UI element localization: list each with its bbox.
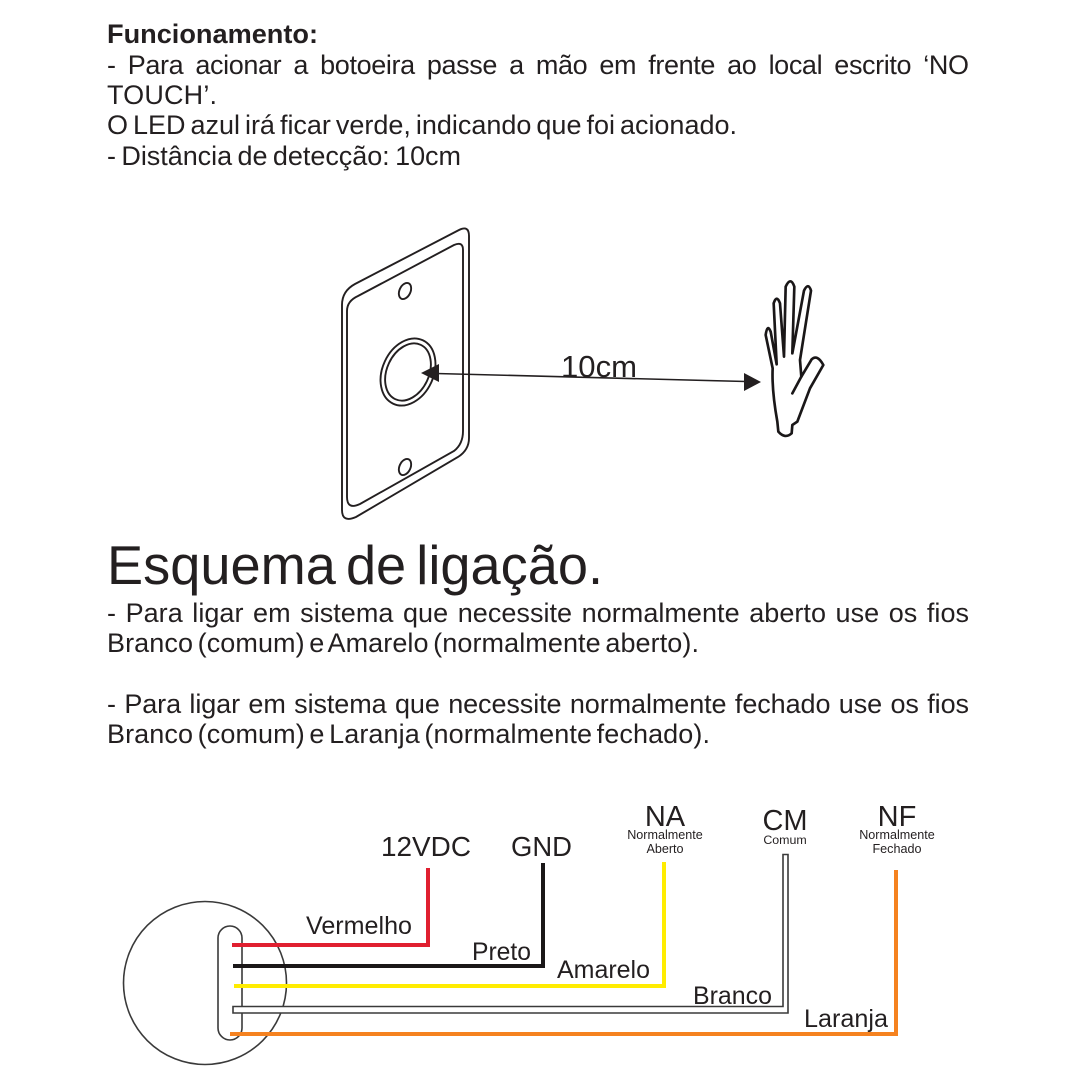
- text block: funcionamento: [107, 19, 969, 171]
- label: normalmente aberto: Normalmente: [627, 828, 703, 842]
- label: normalmente fechado: Fechado: [872, 842, 922, 856]
- icon: hand: [766, 281, 823, 436]
- label: NF: NF: [878, 801, 916, 833]
- label: amarelo: Amarelo: [557, 956, 650, 984]
- text block: normally closed: [107, 689, 969, 749]
- instruction line 1: - Para acionar a botoeira passe a mão em frente ao local escrito ‘NO: [107, 50, 969, 80]
- plate outer outline: [342, 228, 469, 519]
- label: GND: GND: [511, 831, 572, 862]
- wire: white: [233, 854, 788, 1013]
- label: preto: Preto: [472, 938, 531, 966]
- normally closed line 2: Branco (comum) e Laranja (normalmente fechado).: [107, 719, 710, 749]
- label: NA: NA: [645, 801, 686, 833]
- button inner ring: [376, 336, 440, 408]
- wire: orange: [230, 870, 896, 1034]
- label: comum: Comum: [763, 833, 807, 847]
- instruction line 2: TOUCH’.: [107, 80, 217, 110]
- label: vermelho: Vermelho: [306, 912, 412, 940]
- heading: funcionamento: Funcionamento:: [107, 19, 318, 49]
- device circle: [124, 902, 286, 1064]
- wire: yellow: [234, 862, 664, 986]
- wire: black: [233, 863, 543, 966]
- label: laranja: Laranja: [804, 1005, 888, 1033]
- instruction line 3: O LED azul irá ficar verde, indicando que foi acionado.: [107, 110, 737, 140]
- label: normalmente fechado: Normalmente: [859, 828, 935, 842]
- normally closed line 1: - Para ligar em sistema que necessite normalmente fechado use os fios: [107, 689, 969, 719]
- screw hole bottom: [396, 457, 414, 477]
- detection distance line: - Distância de detecção: 10cm: [107, 141, 461, 171]
- label: normalmente aberto: Aberto: [646, 842, 684, 856]
- normally open line 1: - Para ligar em sistema que necessite normalmente aberto use os fios: [107, 598, 969, 628]
- label: CM: CM: [762, 805, 808, 837]
- label: 10cm: 10cm: [561, 349, 637, 384]
- title: esquema de ligação: Esquema de ligação.: [107, 534, 603, 596]
- label: 12VDC: 12VDC: [381, 831, 471, 862]
- illustration: wall plate with button: [342, 228, 469, 519]
- normally open line 2: Branco (comum) e Amarelo (normalmente aberto).: [107, 628, 699, 658]
- plate inner outline: [347, 244, 463, 506]
- wiring diagram: [124, 801, 935, 1064]
- screw hole top: [396, 281, 414, 301]
- button outer ring: [370, 330, 446, 414]
- wire: red: [232, 868, 428, 945]
- device slot: [218, 926, 242, 1040]
- label: branco: Branco: [693, 982, 772, 1010]
- text block: normally open: [107, 598, 969, 658]
- arrow: 10cm distance: [421, 364, 761, 391]
